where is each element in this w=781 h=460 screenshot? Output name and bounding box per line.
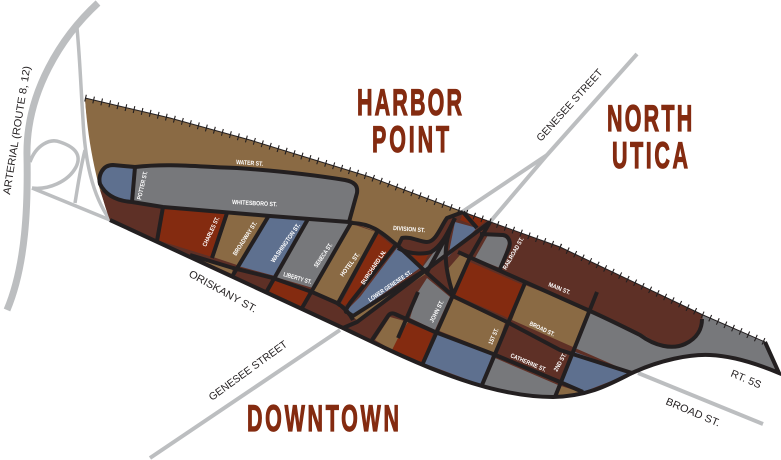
street labels inside map: WASHINGTON ST. bbox=[270, 222, 302, 264]
street labels inside map: LOWER GENESEE ST. bbox=[367, 269, 414, 304]
title: North Utica: UTICA bbox=[612, 136, 688, 177]
outer road labels: GENESEE STREET bbox=[534, 66, 606, 144]
street labels inside map: SENECA ST. bbox=[313, 242, 334, 269]
title: North Utica: NORTH bbox=[607, 99, 692, 140]
street labels inside map: HOTEL ST. bbox=[339, 251, 362, 278]
red blocks bbox=[157, 208, 523, 363]
brown blocks bbox=[190, 213, 588, 397]
gray blocks bbox=[132, 165, 779, 397]
title: Harbor Point: POINT bbox=[372, 120, 450, 161]
street labels inside map: CATHERINE ST. bbox=[509, 352, 547, 374]
outer road labels bbox=[1, 65, 763, 429]
street labels inside map: MAIN ST. bbox=[547, 281, 571, 297]
harbor point brown land bbox=[85, 98, 463, 245]
street labels inside map: DIVISION ST. bbox=[393, 225, 425, 234]
map of Harbor Point blocks bbox=[85, 98, 779, 397]
title: Harbor Point bbox=[357, 83, 462, 161]
street labels inside map bbox=[136, 159, 571, 374]
blue blocks bbox=[99, 165, 632, 392]
title: North Utica bbox=[607, 99, 692, 177]
street labels inside map: LIBERTY ST. bbox=[282, 271, 312, 286]
railroad track bbox=[85, 98, 765, 342]
outer road labels: BROAD ST. bbox=[664, 396, 722, 429]
street labels inside map: POTTER ST. bbox=[136, 170, 150, 200]
street labels inside map: CHARLES ST. bbox=[201, 216, 221, 248]
dark brown blocks bbox=[100, 190, 455, 252]
street labels inside map: WATER ST. bbox=[236, 159, 264, 168]
outer road labels: GENESEE STREET bbox=[207, 338, 290, 403]
street labels inside map: BURCHARD LN. bbox=[360, 249, 388, 286]
outer road labels: ORISKANY ST. bbox=[187, 268, 259, 315]
street labels inside map: WHITESBORO ST. bbox=[232, 199, 277, 208]
title: Harbor Point: HARBOR bbox=[357, 83, 462, 124]
black street network bbox=[100, 165, 702, 397]
base land silhouette: dark brown bbox=[85, 98, 779, 397]
street labels inside map: JOHN ST. bbox=[429, 299, 446, 324]
street labels inside map: BROADWAY ST. bbox=[232, 220, 259, 257]
street labels inside map: 1ST ST. bbox=[487, 327, 501, 346]
street labels inside map: RAILROAD ST. bbox=[502, 236, 526, 271]
outer road labels: ARTERIAL (ROUTE 8, 12) bbox=[1, 65, 33, 195]
title: Downtown: DOWNTOWN bbox=[247, 399, 399, 440]
street labels inside map: 2ND ST. bbox=[553, 352, 569, 373]
street labels inside map: BROAD ST. bbox=[528, 320, 556, 338]
outer road labels: RT. 5S bbox=[729, 368, 763, 391]
outer boundary road bbox=[110, 220, 779, 397]
